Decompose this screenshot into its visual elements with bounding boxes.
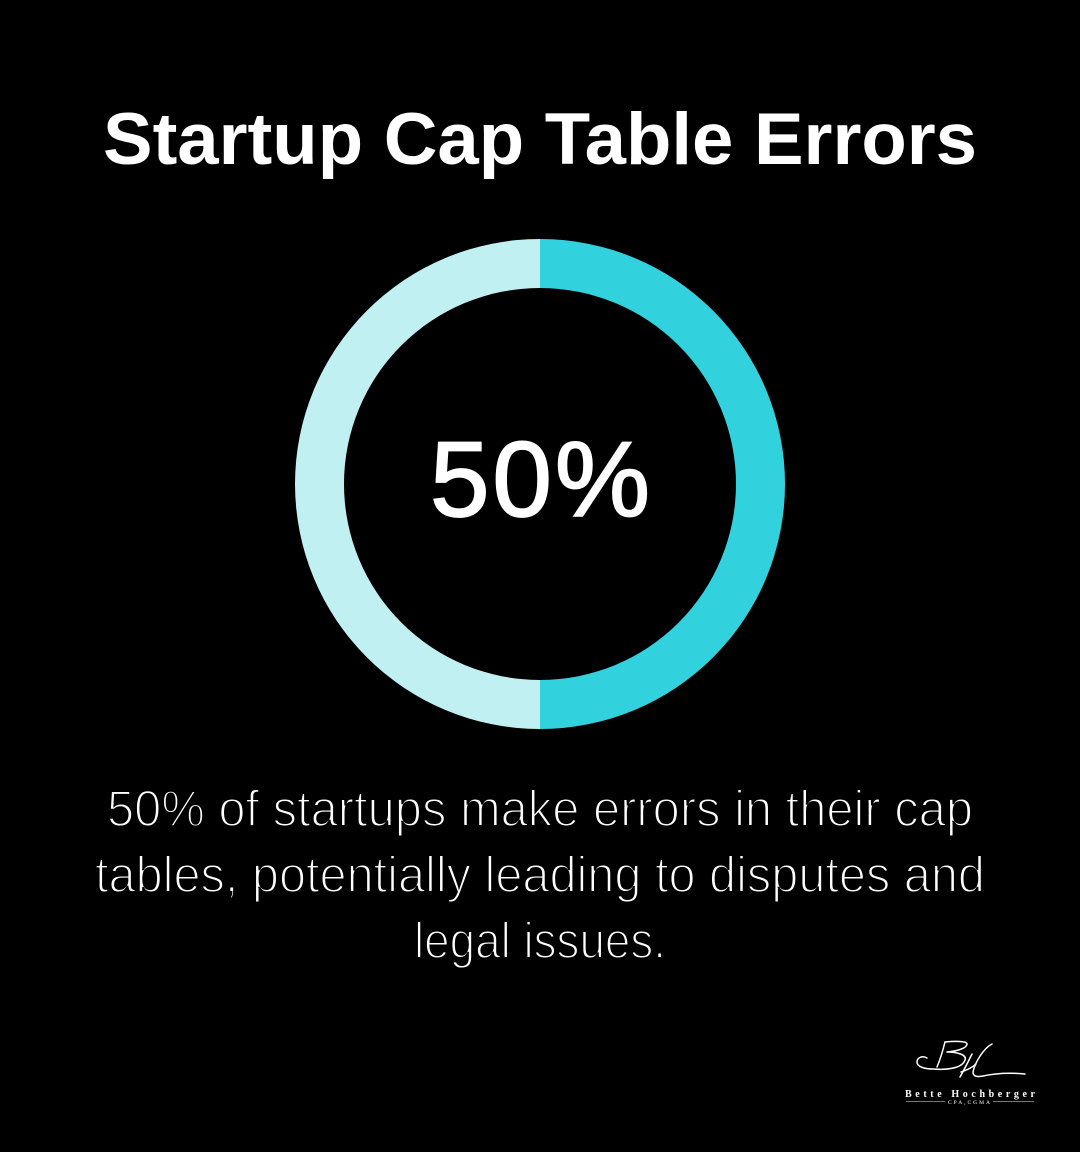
center percentage: 50%	[430, 419, 650, 539]
logo: Bette Hochberger signature	[905, 1041, 1036, 1106]
description text: legal issues.	[414, 912, 666, 969]
title: Startup Cap Table Errors	[103, 99, 977, 180]
signature mark	[917, 1041, 1025, 1077]
highlighted half of the ring	[540, 239, 785, 729]
description text: tables, potentially leading to disputes and	[95, 846, 985, 903]
description text	[95, 780, 985, 969]
logo rule left	[906, 1101, 945, 1102]
description text: 50% of startups make errors in their cap	[107, 780, 973, 837]
donut chart: 50 percent	[295, 239, 785, 729]
logo rule right	[993, 1101, 1034, 1102]
remaining half of the ring	[295, 239, 540, 729]
logo name: Bette Hochberger	[905, 1089, 1036, 1100]
logo credentials: CPA,CGMA	[948, 1100, 990, 1106]
